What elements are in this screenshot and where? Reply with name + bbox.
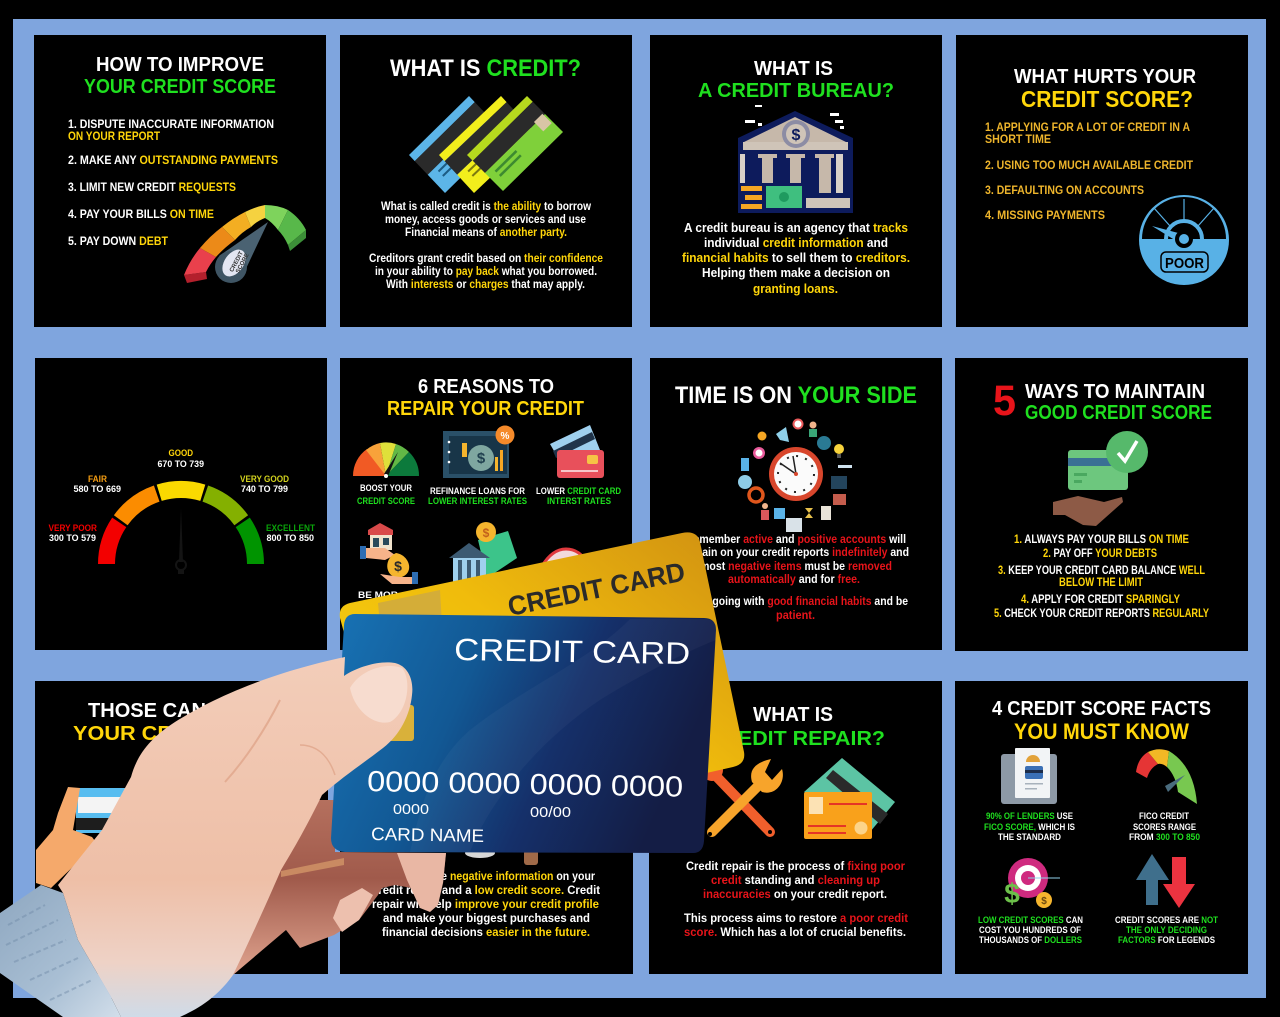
heading: credit repair: WHAT IS <box>753 704 833 726</box>
blue credit card <box>331 614 716 853</box>
blue credit card: 0000 0000 0000 0000 <box>367 766 683 804</box>
list: improvement steps: 3. LIMIT NEW CREDIT REQUESTS <box>68 182 236 194</box>
list: ways to maintain: 3. KEEP YOUR CREDIT CARD BALANCE WELL <box>998 565 1205 577</box>
heading: time on your side: TIME IS ON YOUR SIDE <box>675 382 917 409</box>
list: improvement steps: 2. MAKE ANY OUTSTANDING PAYMENTS <box>68 155 278 167</box>
icon: card on hand with check <box>1053 431 1148 526</box>
icon: bank building <box>738 105 853 213</box>
labels: reasons row one: LOWER INTEREST RATES <box>428 496 527 506</box>
list: what hurts: 4. MISSING PAYMENTS <box>985 210 1105 222</box>
blue credit card: CREDIT CARD <box>454 632 690 671</box>
heading: 6 reasons <box>387 376 584 420</box>
icon: credit report <box>1001 748 1057 804</box>
icon: refinance safe <box>443 426 514 478</box>
panel: what is credit repair <box>649 681 942 974</box>
labels: reasons row one: BOOST YOUR <box>360 483 412 493</box>
text: time explanation: patient. <box>776 610 815 622</box>
heading: 5 ways: 5 <box>993 377 1016 425</box>
panel: 5 ways to maintain good credit score <box>955 358 1248 651</box>
list: ways to maintain: 5. CHECK YOUR CREDIT REPORTS REGULARLY <box>994 608 1209 620</box>
text: credit definition: What is called credit is the ability to borrow <box>381 201 591 213</box>
list: improvement steps: ON YOUR REPORT <box>68 131 160 143</box>
heading: credit bureau <box>698 58 894 102</box>
panel: time is on your side <box>650 358 942 650</box>
label: not only deciding: FACTORS FOR LEGENDS <box>1118 935 1215 945</box>
blue credit card: 00/00 <box>530 804 571 821</box>
heading: how to improve: YOUR CREDIT SCORE <box>84 76 276 98</box>
label: fico range: SCORES RANGE <box>1133 822 1196 832</box>
label: 90 percent of lenders: 90% OF LENDERS USE <box>986 811 1073 821</box>
icon: orange card over green card <box>804 758 895 839</box>
icon: refinance safe: % <box>501 431 510 442</box>
list: ways to maintain: 1. ALWAYS PAY YOUR BILLS ON TIME <box>1014 534 1189 546</box>
icon: poor gauge: POOR <box>1165 255 1204 272</box>
heading: credit bureau: WHAT IS <box>754 58 833 80</box>
heading: 5 ways: GOOD CREDIT SCORE <box>1025 402 1212 424</box>
list: improvement steps <box>68 119 278 248</box>
text: time explanation: most negative items must be removed <box>700 561 892 573</box>
text: bureau definition: individual credit information and <box>704 235 888 250</box>
icon: crossed wrenches <box>701 759 783 836</box>
panel: score range gauge <box>35 358 327 650</box>
text: bureau definition: financial habits to sell them to creditors. <box>682 250 910 265</box>
chart: credit score gauge segments <box>98 481 264 574</box>
labels: reasons row one: CREDIT SCORE <box>357 496 415 506</box>
text: time explanation: Remember active and positive accounts will <box>686 534 906 546</box>
heading: what hurts: WHAT HURTS YOUR <box>1014 66 1197 88</box>
labels: reasons row one: INTERST RATES <box>547 496 611 506</box>
text: repair explanation <box>372 871 600 939</box>
heading: how to improve: HOW TO IMPROVE <box>96 54 264 76</box>
text: credit definition <box>369 201 603 291</box>
icon: 3D credit score gauge <box>184 205 306 283</box>
labels: score ranges: GOOD <box>168 448 193 458</box>
heading: 6 reasons: 6 REASONS TO <box>418 376 554 398</box>
text: bureau definition: granting loans. <box>753 281 838 296</box>
labels: score ranges: VERY GOOD <box>240 474 289 484</box>
text: repair explanation: financial decisions easier in the future. <box>382 927 590 939</box>
text: repair explanation: repair will help improve your credit profile <box>372 899 599 911</box>
heading: those can: YOUR CR <box>73 723 174 745</box>
heading: 4 facts: 4 CREDIT SCORE FACTS <box>992 698 1211 720</box>
heading: what hurts <box>1014 66 1197 112</box>
icon: target with dollar: $ <box>1004 878 1020 909</box>
icon: clock with surrounding icons <box>738 418 852 532</box>
heading: 4 facts <box>992 698 1211 744</box>
list: ways to maintain: BELOW THE LIMIT <box>1059 577 1143 589</box>
labels: reasons row one: REFINANCE LOANS FOR <box>430 486 525 496</box>
text: credit repair definition <box>684 861 908 939</box>
icon: house in hand and money bag <box>360 523 418 584</box>
list: what hurts: SHORT TIME <box>985 134 1051 146</box>
label: fico range: FROM 300 TO 850 <box>1129 832 1200 842</box>
list: what hurts: 3. DEFAULTING ON ACCOUNTS <box>985 185 1144 197</box>
text: credit definition: Creditors grant credit based on their confidence <box>369 253 603 265</box>
labels: score ranges: 740 TO 799 <box>241 484 288 494</box>
label: not only deciding <box>1115 915 1218 945</box>
text: credit definition: With interests or charges that may apply. <box>386 279 585 291</box>
list: improvement steps: 5. PAY DOWN DEBT <box>68 236 168 248</box>
heading: what is credit: WHAT IS CREDIT? <box>390 55 581 82</box>
icon: bank and banknote <box>449 522 517 584</box>
icon: three bank cards <box>409 96 563 193</box>
heading: 4 facts: YOU MUST KNOW <box>1014 719 1189 744</box>
heading: how to improve <box>84 54 276 98</box>
label: 90 percent of lenders <box>984 811 1075 842</box>
list: improvement steps: 1. DISPUTE INACCURATE INFORMATION <box>68 119 274 131</box>
yellow credit card <box>340 532 744 840</box>
text: time explanation: automatically and for free. <box>728 574 860 586</box>
panel: those can help your credit <box>35 681 328 974</box>
label: low scores: LOW CREDIT SCORES CAN <box>978 915 1083 925</box>
list: ways to maintain: 4. APPLY FOR CREDIT SPARINGLY <box>1021 594 1180 606</box>
labels: score ranges: FAIR <box>88 474 107 484</box>
label: mortgage reason: BE MOR <box>358 590 399 600</box>
text: credit definition: money, access goods or services and use <box>385 214 586 226</box>
text: time explanation: Keep going with good financial habits and be <box>684 596 908 608</box>
panel: what is a credit bureau <box>650 35 942 327</box>
text: credit repair definition: This process aims to restore a poor credit <box>684 913 908 925</box>
text: time explanation: remain on your credit reports indefinitely and <box>683 547 909 559</box>
icon: fico gauge <box>1136 749 1197 804</box>
labels: reasons row one <box>357 483 621 506</box>
text: bureau definition: Helping them make a decision on <box>702 265 890 280</box>
blue credit card: CARD NAME <box>371 824 484 846</box>
blue credit card: 0000 <box>393 801 429 818</box>
yellow credit card: CREDIT CARD <box>505 557 688 622</box>
list: what hurts: 1. APPLYING FOR A LOT OF CREDIT IN A <box>985 122 1190 134</box>
icon: bank and banknote: $ <box>483 526 490 540</box>
labels: score ranges: 800 TO 850 <box>266 533 314 543</box>
text: credit repair definition: credit standing and cleaning up <box>711 875 880 887</box>
label: low scores <box>978 915 1083 945</box>
label: not only deciding: THE ONLY DECIDING <box>1126 925 1207 935</box>
list: ways to maintain <box>994 534 1209 620</box>
text: credit definition: in your ability to pay back what you borrowed. <box>375 266 597 278</box>
label: low scores: COST YOU HUNDREDS OF <box>979 925 1081 935</box>
icon: house in hand and money bag: $ <box>394 558 402 574</box>
panel: what hurts your credit score <box>956 35 1248 327</box>
panel: 6 reasons to repair your credit <box>340 358 632 650</box>
label: 90 percent of lenders: FICO SCORE, WHICH IS <box>984 822 1075 832</box>
heading: those can <box>73 700 206 745</box>
list: ways to maintain: 2. PAY OFF YOUR DEBTS <box>1043 548 1157 560</box>
labels: score ranges: VERY POOR <box>48 523 97 533</box>
label: not only deciding: CREDIT SCORES ARE NOT <box>1115 915 1218 925</box>
panel: what is credit <box>340 35 632 327</box>
icon: bank building: $ <box>792 127 801 144</box>
text: repair explanation: credit report and a low credit score. Credit <box>372 885 600 897</box>
text: credit repair definition: score. Which has a lot of crucial benefits. <box>684 927 906 939</box>
icon: partly hidden illustration <box>465 848 538 865</box>
labels: score ranges: EXCELLENT <box>266 523 315 533</box>
list: improvement steps: 4. PAY YOUR BILLS ON TIME <box>68 209 214 221</box>
icon: target with dollar <box>1004 858 1060 909</box>
panel: 4 credit score facts <box>955 681 1248 974</box>
text: repair explanation: and make your biggest purchases and <box>383 913 590 925</box>
text: bureau definition <box>682 220 910 296</box>
icon: 3D credit score gauge: CREDIT <box>229 251 245 273</box>
icon: poor gauge <box>1139 195 1229 285</box>
labels: score ranges: 670 TO 739 <box>158 459 204 469</box>
icon: car <box>542 549 588 566</box>
icon: credit cards <box>550 425 604 478</box>
icon: boost gauge <box>353 442 419 478</box>
text: time explanation <box>683 534 909 622</box>
heading: 6 reasons: REPAIR YOUR CREDIT <box>387 398 584 420</box>
labels: score ranges: 580 TO 669 <box>74 484 121 494</box>
heading: credit repair <box>707 704 885 750</box>
heading: credit bureau: A CREDIT BUREAU? <box>698 80 894 102</box>
hand back and fingers <box>233 800 446 975</box>
icon: hand holding card <box>36 787 136 888</box>
text: credit repair definition: inaccuracies on your credit report. <box>703 889 887 901</box>
label: low scores: THOUSANDS OF DOLLERS <box>979 935 1082 945</box>
heading: 5 ways: WAYS TO MAINTAIN <box>1025 381 1205 403</box>
text: repair explanation: You may have negative information on your <box>377 871 595 883</box>
icon: target with dollar: $ <box>1041 896 1047 907</box>
label: 90 percent of lenders: THE STANDARD <box>998 832 1061 842</box>
label: fico range <box>1129 811 1200 842</box>
labels: score ranges: 300 TO 579 <box>49 533 96 543</box>
labels: score ranges <box>48 448 315 543</box>
icon: refinance safe: $ <box>477 450 486 467</box>
text: credit definition: Financial means of another party. <box>405 227 567 239</box>
heading: those can: THOSE CAN <box>88 700 206 722</box>
panel: how to improve your credit score <box>34 35 326 327</box>
hand palm and thumb <box>58 657 412 1017</box>
heading: credit repair: CREDIT REPAIR? <box>707 728 885 750</box>
text: credit repair definition: Credit repair is the process of fixing poor <box>686 861 905 873</box>
icon: 3D credit score gauge: SCORE <box>235 253 251 274</box>
labels: reasons row one: LOWER CREDIT CARD <box>536 486 621 496</box>
text: bureau definition: A credit bureau is an agency that tracks <box>684 220 908 235</box>
sweater sleeve <box>0 885 121 1017</box>
icon: up and down arrows <box>1136 854 1195 908</box>
list: what hurts <box>985 122 1193 222</box>
list: what hurts: 2. USING TOO MUCH AVAILABLE CREDIT <box>985 160 1193 172</box>
label: fico range: FICO CREDIT <box>1139 811 1189 821</box>
heading: 5 ways <box>993 377 1212 425</box>
heading: what hurts: CREDIT SCORE? <box>1021 86 1193 112</box>
panel: what credit repair can do <box>340 681 633 974</box>
